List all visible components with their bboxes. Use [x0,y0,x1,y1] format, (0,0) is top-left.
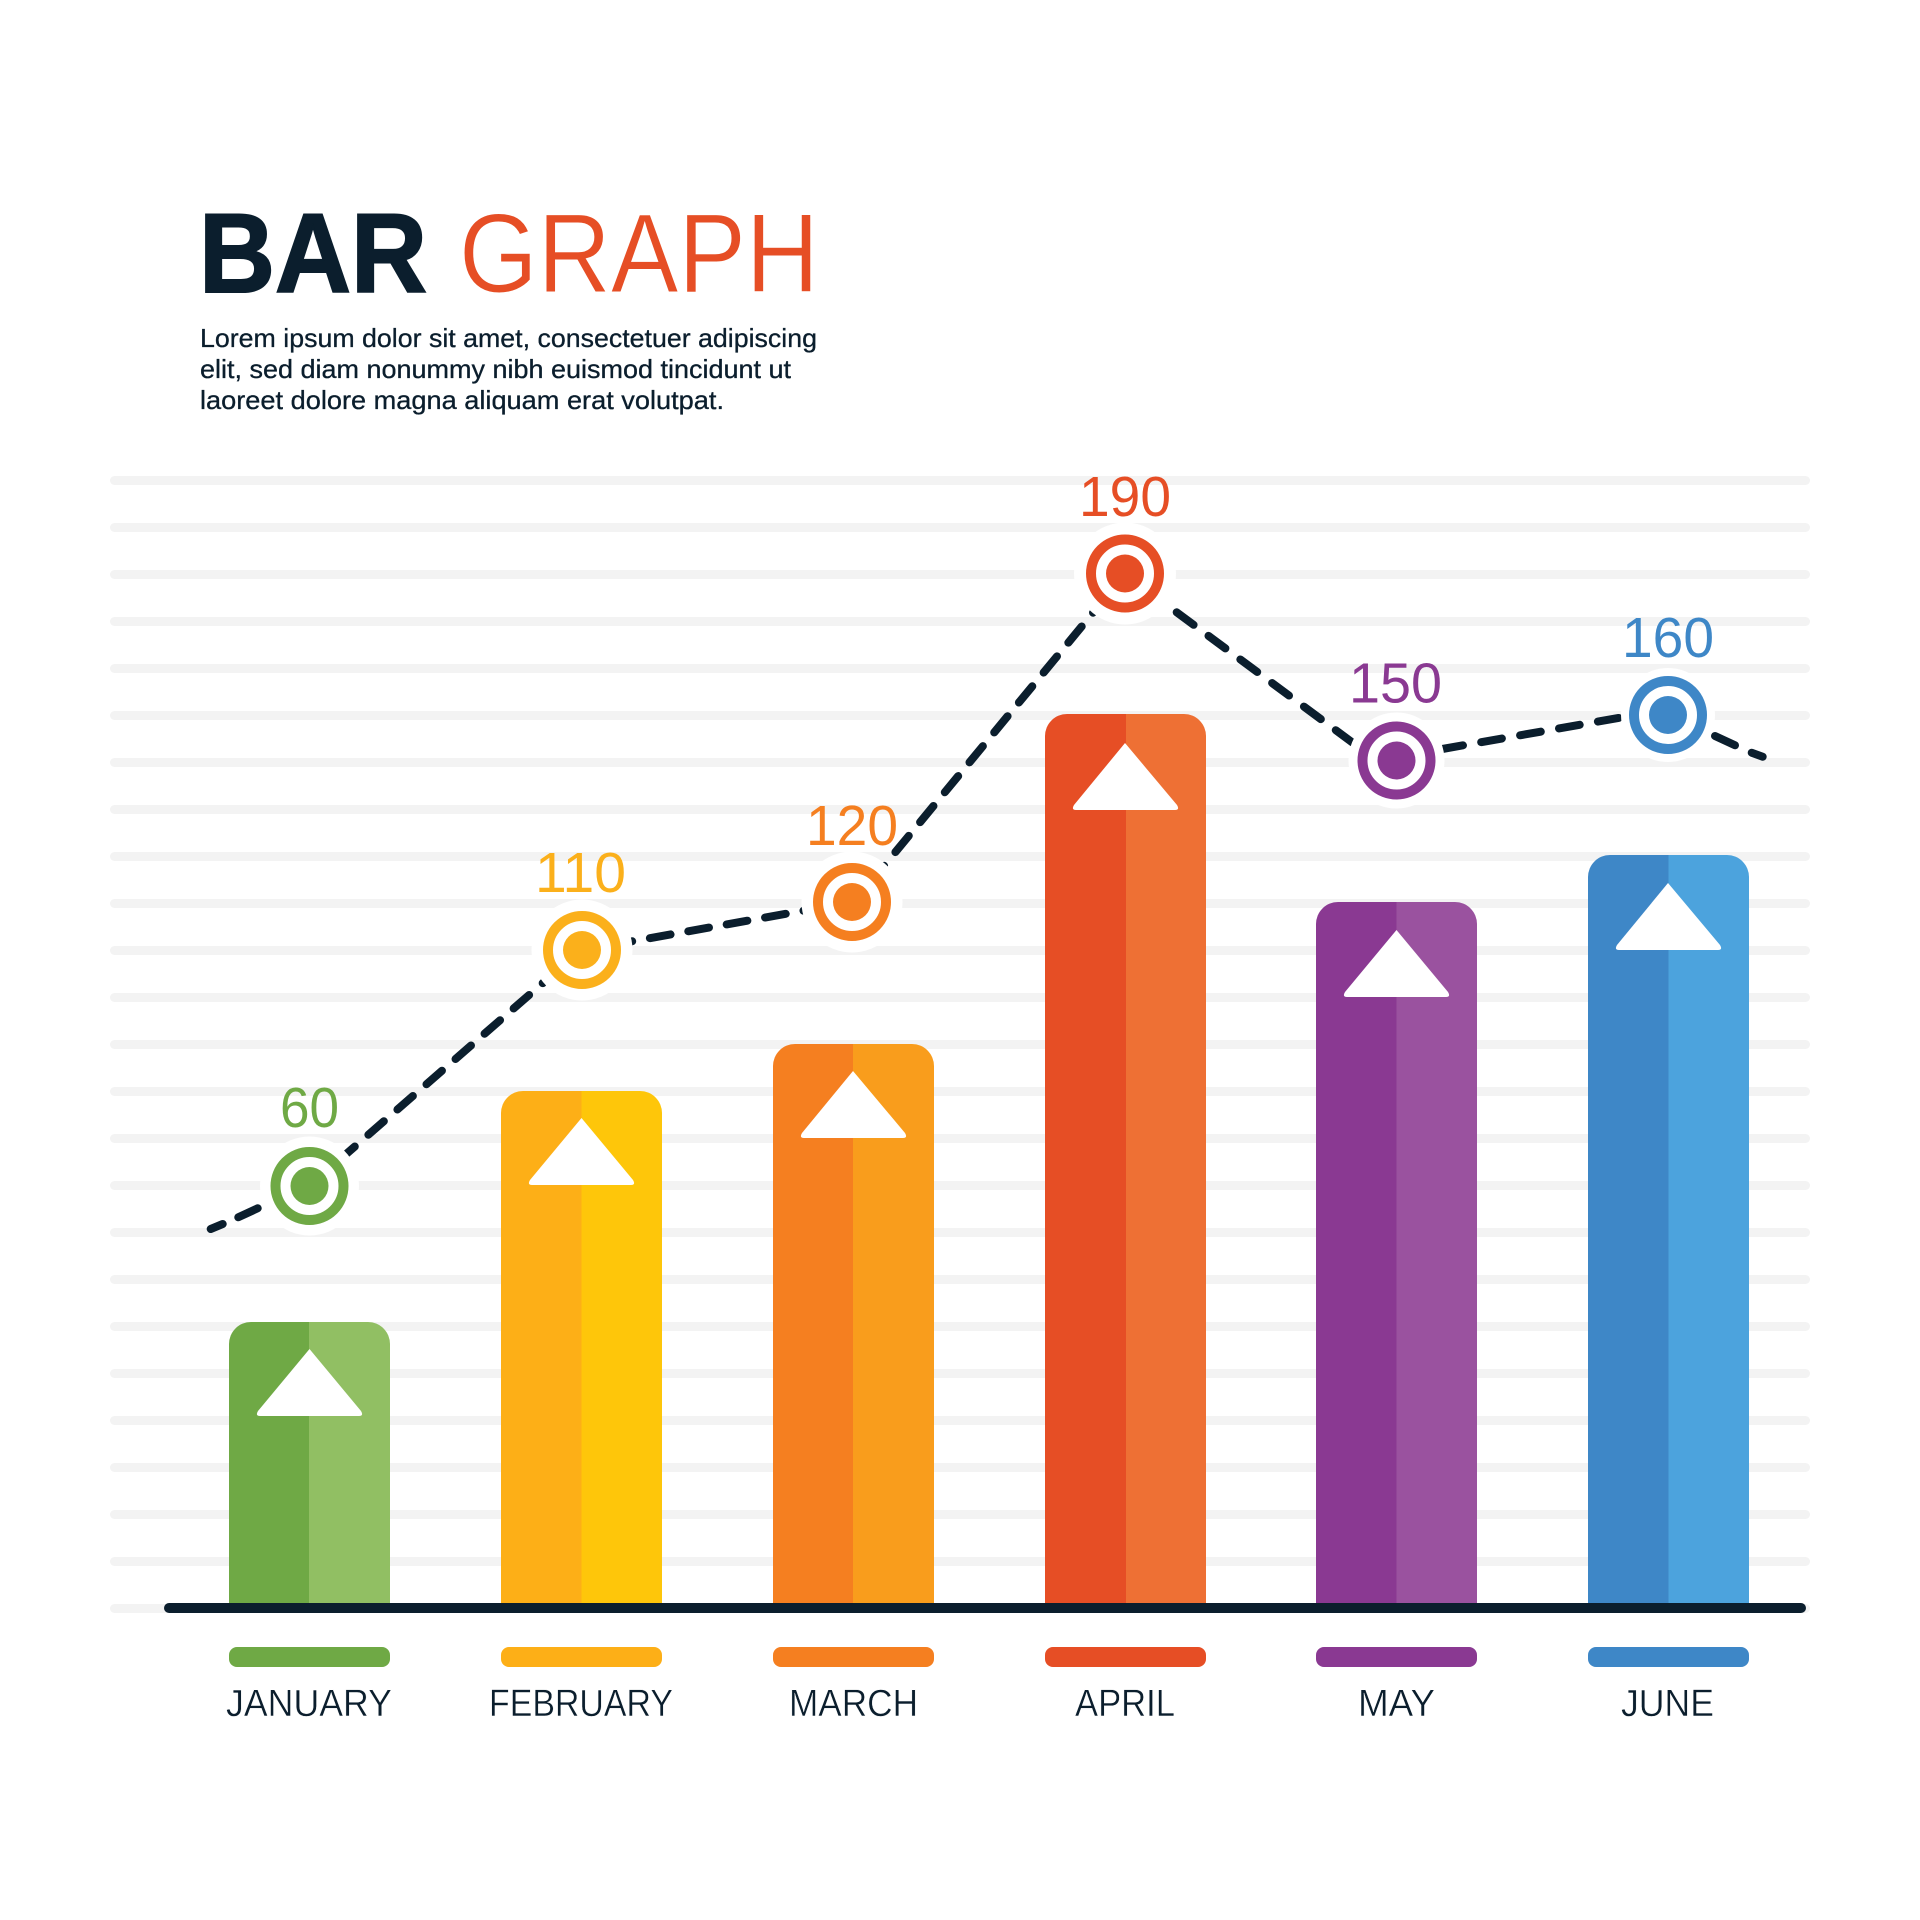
title: BAR [199,191,427,316]
legend: March [773,1647,934,1725]
marker: January 60: 60 [280,1076,339,1140]
axis baseline [164,1603,1806,1613]
title [199,191,819,316]
marker: March 120 [802,794,902,952]
legend: April: APRIL [1075,1683,1175,1725]
bar: March [773,1044,934,1605]
marker: May 150 [1348,652,1444,808]
dashed trend line [211,574,1763,1229]
marker: May 150: 150 [1349,652,1442,716]
title: GRAPH [459,191,819,316]
description text: Lorem ipsum dolor sit amet, consectetuer adipiscing [200,323,817,353]
description text: elit, sed diam nonummy nibh euismod tincidunt ut [200,354,792,384]
description text [200,323,817,415]
legend: June [1588,1647,1749,1725]
legend: May: MAY [1358,1683,1435,1725]
bar: May [1316,902,1477,1605]
marker: June 160 [1621,606,1715,762]
legend: January: JANUARY [226,1683,392,1725]
bar: June [1588,855,1749,1605]
marker: January 60 [260,1076,359,1236]
marker: April 190: 190 [1079,465,1171,529]
marker: March 120: 120 [806,794,898,858]
bar: January [229,1322,390,1605]
bar: February [501,1091,662,1605]
marker: April 190 [1074,465,1176,624]
legend: January [226,1647,392,1725]
marker: February 110 [532,841,632,1000]
description text: laoreet dolore magna aliquam erat volutpat. [200,385,724,415]
bar: April [1045,714,1206,1605]
legend: June: JUNE [1621,1683,1714,1725]
marker: June 160: 160 [1622,606,1714,670]
legend: April [1045,1647,1206,1725]
legend: May [1316,1647,1477,1725]
legend: March: MARCH [789,1683,918,1725]
legend: February [489,1647,673,1725]
legend: February: FEBRUARY [489,1683,673,1725]
marker: February 110: 110 [535,841,626,905]
